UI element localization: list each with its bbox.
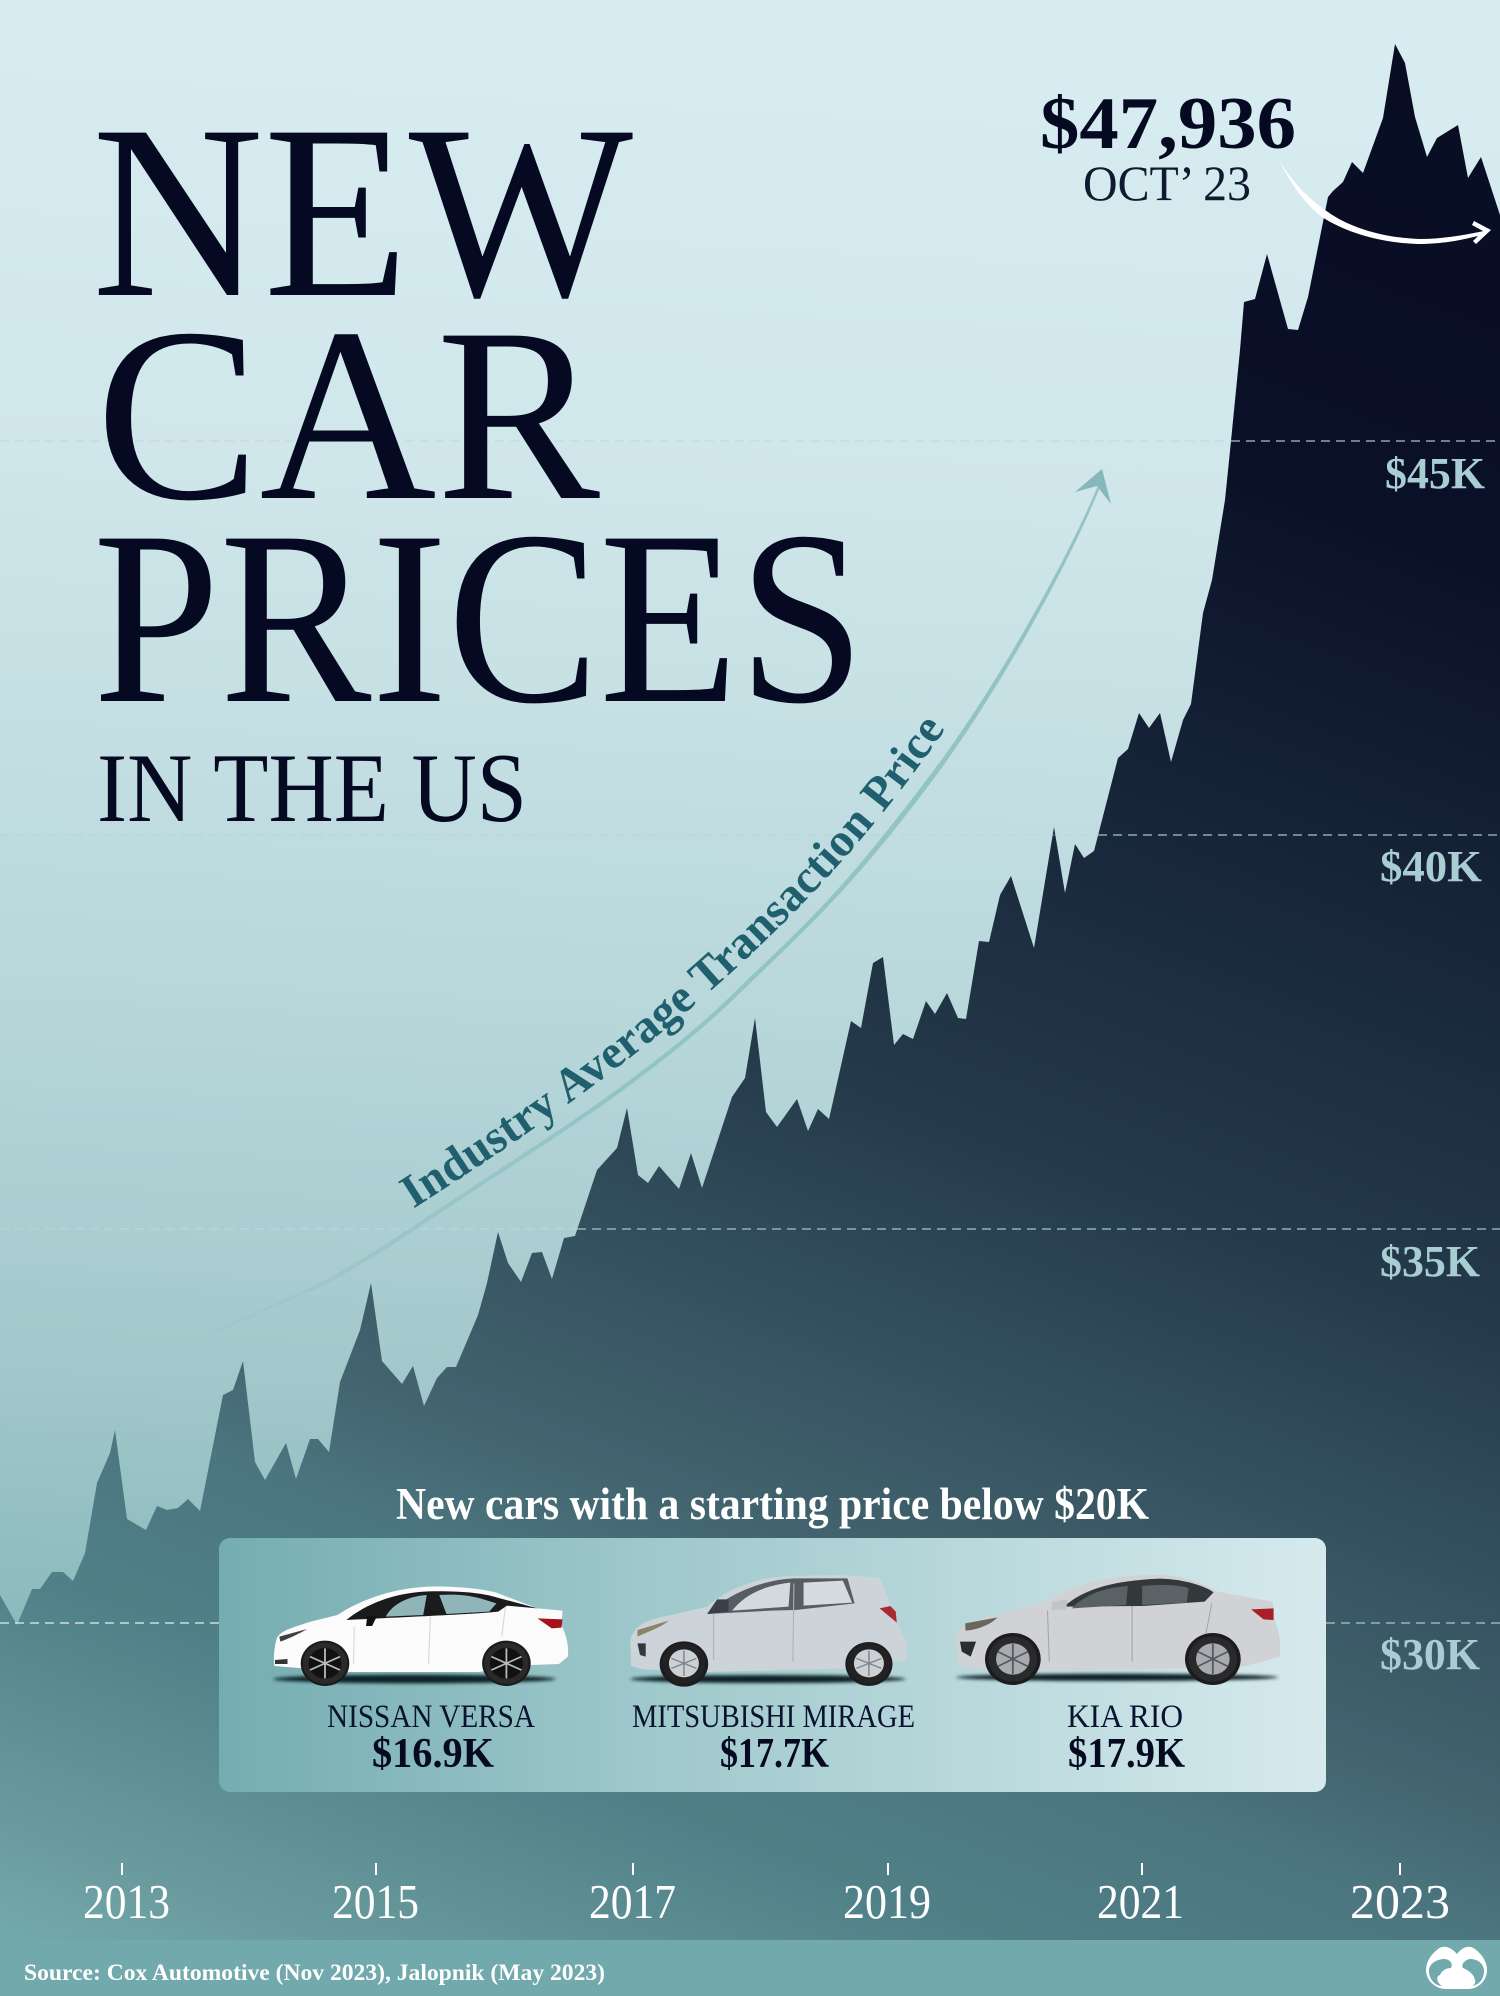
car: Mitsubishi Mirage [630,1575,907,1687]
curved label: Industry Average Transaction Price: Industry Average Transaction Price [398,720,944,1208]
title line: CAR: CAR [96,277,601,552]
car name: Mitsubishi Mirage: MITSUBISHI MIRAGE [632,1699,915,1735]
car: Kia Rio [956,1575,1280,1685]
icon: publisher logo [1426,1947,1487,1989]
label: $35K: $35K [1380,1237,1480,1286]
label: $45K: $45K [1385,449,1485,498]
year 2013: 2013 [83,1874,170,1929]
title line: PRICES: PRICES [93,480,865,755]
y-axis labels [1380,449,1485,1679]
car price: Mitsubishi Mirage: $17.7K [720,1731,829,1777]
trend arrow [127,469,1111,1371]
year 2023: 2023 [1350,1874,1450,1929]
car price: Nissan Versa: $16.9K [372,1731,494,1777]
title line: NEW: NEW [92,74,633,349]
subtitle: IN THE US: IN THE US [97,734,527,843]
panel: cars below $20K [219,1538,1326,1792]
year 2017: 2017 [589,1874,676,1929]
label: $30K: $30K [1380,1630,1480,1679]
label: $40K: $40K [1380,842,1482,891]
arrow: callout to peak [1280,162,1491,244]
x-axis [83,1863,1450,1929]
year 2019: 2019 [843,1874,931,1929]
peak value: $47,936 [1040,83,1296,165]
car: Nissan Versa [273,1586,568,1686]
peak callout [1040,83,1491,244]
title [92,74,865,843]
car name: Nissan Versa: NISSAN VERSA [327,1699,535,1735]
year 2015: 2015 [332,1874,419,1929]
footer bar [0,1940,1500,1996]
peak date: OCT’ 23 [1083,155,1251,211]
source: Source: Cox Automotive (Nov 2023), Jalopnik (May 2023) [24,1960,605,1985]
car name: Kia Rio: KIA RIO [1067,1699,1183,1735]
panel heading: New cars with a starting price below $20K [396,1479,1149,1529]
car price: Kia Rio: $17.9K [1068,1731,1185,1777]
arrowhead [1075,469,1111,504]
year 2021: 2021 [1097,1874,1184,1929]
